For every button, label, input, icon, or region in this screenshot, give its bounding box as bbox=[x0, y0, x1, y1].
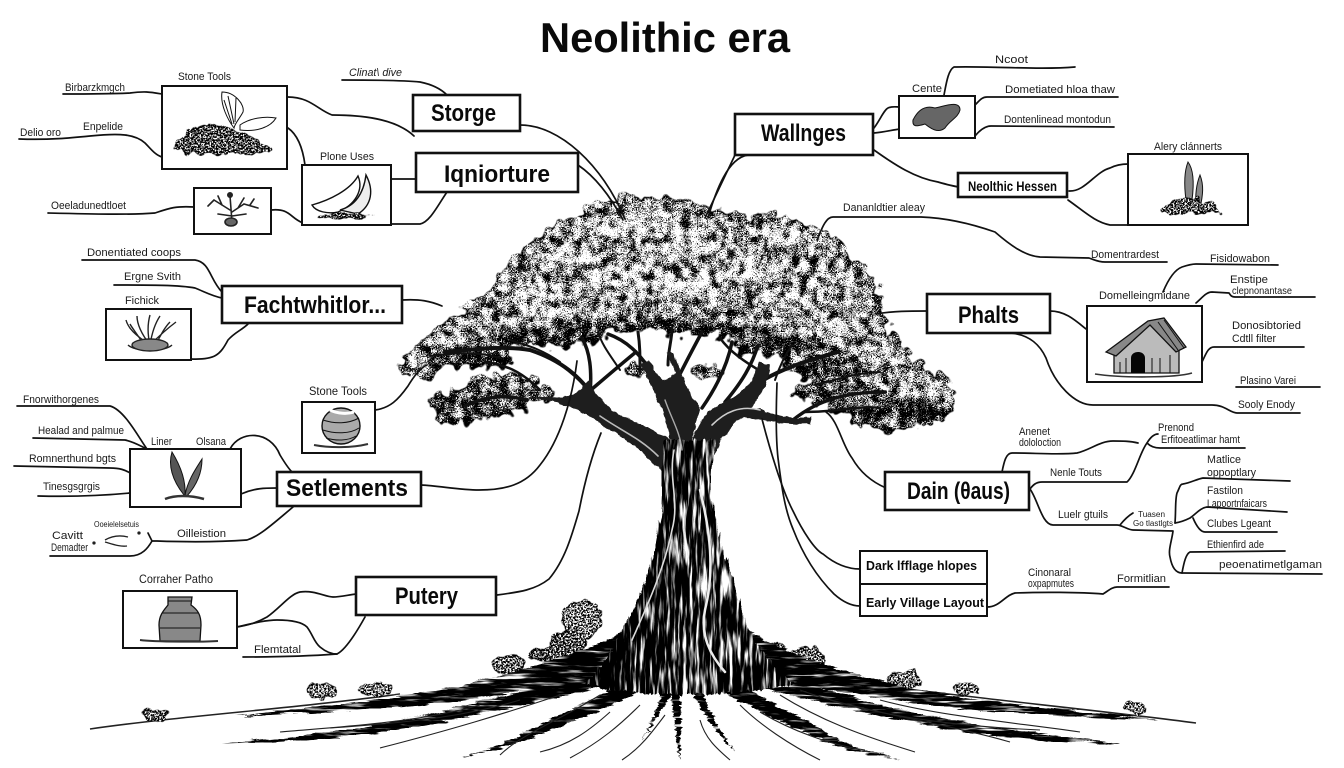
icon: sprig bbox=[208, 193, 258, 226]
note: Plasino Varei bbox=[1240, 375, 1296, 387]
note: Romnerthund bgts bbox=[29, 453, 116, 465]
branch: Domentrardest note bbox=[817, 202, 1167, 262]
box: Early Village Layout bbox=[860, 584, 987, 616]
icon: knobbly stone bbox=[913, 104, 960, 131]
caption: Stone Tools bbox=[178, 71, 231, 83]
label: Storge: Storge bbox=[431, 100, 496, 127]
branch: Dain bbox=[826, 412, 1322, 574]
note: oxpapmutes bbox=[1028, 578, 1074, 590]
branch: Wallnges bbox=[705, 54, 1248, 225]
note: Fisidowabon bbox=[1210, 253, 1270, 265]
box: Storge bbox=[413, 95, 520, 131]
note: Domelleingmidane bbox=[1099, 290, 1190, 302]
note: Tuasen bbox=[1138, 510, 1165, 519]
thin rootlets bbox=[280, 690, 1080, 760]
note: Oeeladunedtloet bbox=[51, 200, 126, 212]
image panel: thatched hut bbox=[1087, 306, 1202, 382]
connectors bbox=[288, 80, 625, 219]
icon: hut bbox=[1095, 318, 1192, 377]
connectors bbox=[876, 264, 1320, 413]
note: Lapoortnfaicars bbox=[1207, 498, 1267, 510]
note: Go tlastlgts bbox=[1133, 519, 1173, 528]
image panel: horns bbox=[302, 165, 391, 225]
branch: Fachtwhitlor bbox=[82, 247, 442, 360]
branch: Storge bbox=[288, 67, 625, 219]
branch: Phalts bbox=[876, 253, 1320, 413]
note: Ncoot bbox=[995, 54, 1028, 66]
note: Flemtatal bbox=[254, 644, 301, 656]
note: Donosibtoried bbox=[1232, 320, 1301, 332]
trunk bbox=[585, 440, 795, 694]
connectors bbox=[237, 433, 601, 657]
connector bbox=[817, 217, 1167, 262]
label: Wallnges: Wallnges bbox=[761, 120, 846, 147]
foliage canopy bbox=[400, 196, 955, 432]
note: Birbarzkmgch bbox=[65, 82, 125, 94]
caption: Fichick bbox=[125, 295, 159, 307]
connectors bbox=[826, 412, 1322, 574]
image panel: grass tuft bbox=[106, 309, 191, 360]
caption: Corraher Patho bbox=[139, 572, 213, 586]
image panel: stone tools bbox=[162, 86, 287, 169]
box: Dain bbox=[885, 472, 1029, 510]
note: peoenatimetlgaman bbox=[1219, 559, 1322, 571]
background bushes bbox=[143, 600, 1147, 719]
note: Anenet bbox=[1019, 426, 1050, 438]
label: Setlements: Setlements bbox=[286, 475, 408, 502]
note: Liner bbox=[151, 436, 172, 448]
box: Fachtwhitlor bbox=[222, 286, 402, 323]
icon: small tool sketch bbox=[93, 532, 140, 546]
icon: heap with leaf bbox=[174, 92, 276, 154]
label: Phalts: Phalts bbox=[958, 302, 1019, 329]
label: Iqniorture: Iqniorture bbox=[444, 161, 550, 188]
note: Sooly Enody bbox=[1238, 399, 1295, 411]
note: Olsana bbox=[196, 436, 227, 448]
label: Dain: Dain (θaus) bbox=[907, 478, 1010, 505]
box: Setlements bbox=[277, 472, 421, 506]
note: oppoptlary bbox=[1207, 467, 1256, 479]
note: Cdtll filter bbox=[1232, 333, 1276, 345]
box: Wallnges bbox=[735, 114, 873, 155]
ground line bbox=[90, 672, 1196, 729]
box: Dark lfflage hlopes bbox=[860, 551, 987, 584]
note: Ergne Svith bbox=[124, 271, 181, 283]
bark light streaks bbox=[600, 400, 760, 672]
caption: Plone Uses bbox=[320, 151, 374, 163]
note: Luelr gtuils bbox=[1058, 509, 1108, 521]
note: Clinat\ dive bbox=[349, 67, 402, 79]
caption: Alery clánnerts bbox=[1154, 141, 1222, 153]
note: Clubes Lgeant bbox=[1207, 518, 1271, 530]
note: Enpelide bbox=[83, 121, 123, 133]
note: clepnonantase bbox=[1232, 286, 1292, 297]
branch: Putery bbox=[123, 433, 601, 657]
note: Oilleistion bbox=[177, 528, 226, 540]
central tree illustration bbox=[90, 196, 1196, 762]
branch: Stone Tools small bbox=[302, 365, 427, 453]
branch: Iqniorture bbox=[19, 71, 623, 234]
image panel: reed clump bbox=[1128, 154, 1248, 225]
connectors bbox=[48, 128, 623, 224]
image panel: round stone bbox=[302, 402, 375, 453]
note: Fnorwithorgenes bbox=[23, 394, 99, 406]
image panel: stone bbox=[899, 96, 975, 138]
note: dololoction bbox=[1019, 437, 1061, 449]
connector bbox=[375, 365, 427, 410]
icon: palm fronds bbox=[165, 452, 204, 499]
note: Tinesgsgrgis bbox=[43, 481, 100, 493]
label: Fachtwhitlor: Fachtwhitlor... bbox=[244, 292, 386, 319]
root system bbox=[220, 618, 1160, 762]
label: Dark lfflage hlopes: Dark lfflage hlopes bbox=[866, 558, 977, 573]
note: Fastilon bbox=[1207, 485, 1243, 497]
note: Enstipe bbox=[1230, 274, 1268, 286]
label: Early Village Layout: Early Village Layout bbox=[866, 595, 985, 610]
box: Iqniorture bbox=[416, 153, 578, 192]
note: Formitlian bbox=[1117, 573, 1166, 585]
note: Dometiated hloa thaw bbox=[1005, 84, 1115, 96]
connectors bbox=[762, 383, 1169, 607]
note: Prenond bbox=[1158, 422, 1194, 434]
note: Cinonaral bbox=[1028, 567, 1071, 579]
branch: Setlements bbox=[14, 361, 577, 556]
note: Healad and palmue bbox=[38, 425, 124, 437]
main limbs and fine branches bbox=[430, 328, 885, 420]
icon: round stone bbox=[314, 408, 368, 447]
note: Cavitt bbox=[52, 530, 83, 542]
connectors bbox=[705, 67, 1128, 225]
note: Delio oro bbox=[20, 127, 61, 139]
note: Ethienfird ade bbox=[1207, 539, 1264, 551]
box: Phalts bbox=[927, 294, 1050, 333]
image panel: clay jar bbox=[123, 591, 237, 648]
connectors bbox=[14, 361, 577, 556]
note: Dananldtier aleay bbox=[843, 202, 925, 214]
icon: grass tuft bbox=[126, 315, 176, 351]
image panel: palm bbox=[130, 449, 241, 507]
note: Ooeielelsetuis bbox=[94, 520, 139, 529]
note: Cente bbox=[912, 83, 942, 95]
title: Neolithic era bbox=[540, 14, 791, 61]
caption: Stone Tools bbox=[309, 384, 367, 398]
icon: reed clump bbox=[1156, 162, 1222, 213]
note: Domentrardest bbox=[1091, 249, 1159, 261]
label: Neolthic Hessen: Neolthic Hessen bbox=[968, 178, 1057, 194]
connectors bbox=[82, 260, 442, 359]
note: Donentiated coops bbox=[87, 247, 182, 259]
left note connectors bbox=[19, 92, 162, 157]
note: Dontenlinead montodun bbox=[1004, 114, 1111, 126]
note: Demadter bbox=[51, 542, 88, 554]
branch: Early Village Layout bbox=[762, 383, 1169, 616]
note: Nenle Touts bbox=[1050, 467, 1102, 479]
label: Putery: Putery bbox=[395, 583, 459, 610]
note: Erfitoeatlimar hamt bbox=[1161, 434, 1240, 446]
icon: jar bbox=[140, 597, 218, 642]
icon: stone blades bbox=[312, 175, 375, 219]
note: Matlice bbox=[1207, 454, 1241, 466]
image panel: sprig bbox=[194, 188, 271, 234]
box: Putery bbox=[356, 577, 496, 615]
box: Neolthic Hessen bbox=[958, 173, 1067, 197]
